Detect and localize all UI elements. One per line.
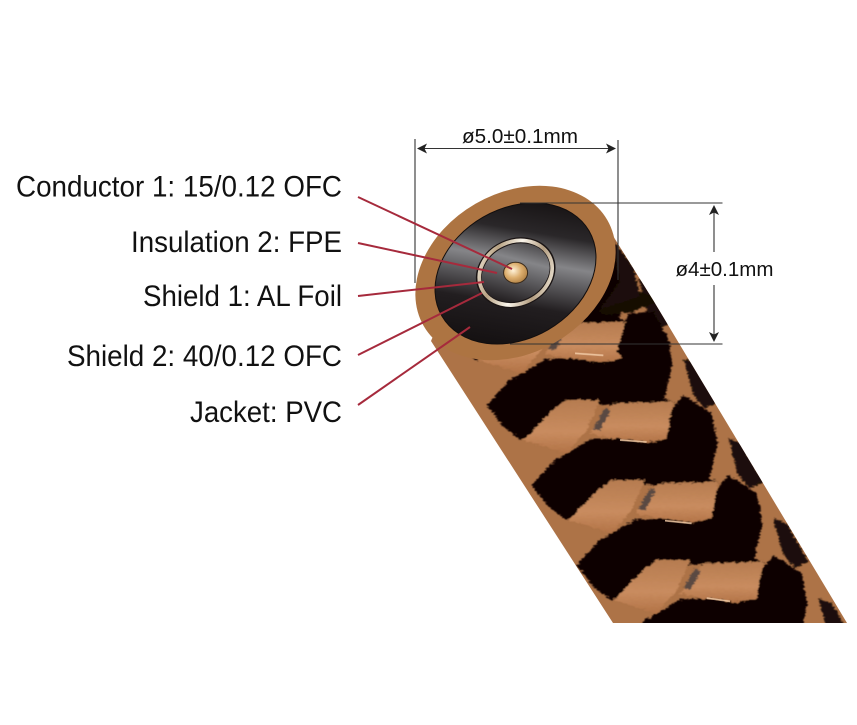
labels: [16, 170, 342, 429]
shield layer: dark core: [409, 175, 622, 372]
shield ring: foil: [468, 229, 563, 317]
diameter dimension: 4 mm: ø4±0.1mm: [676, 259, 774, 281]
cable cross-section infographic: [17, 129, 847, 623]
labels: Insulation 2: FPE: [131, 226, 342, 259]
diameter dimension: 5.0 mm: ø5.0±0.1mm: [462, 126, 578, 148]
diameter dimension: 5.0 mm: [415, 126, 618, 283]
diameter dimension: 4 mm: [510, 203, 774, 344]
labels: Shield 1: AL Foil: [143, 280, 342, 313]
braid highlights: [575, 353, 730, 601]
labels: Conductor 1: 15/0.12 OFC: [16, 170, 342, 204]
labels: Jacket: PVC: [190, 396, 342, 429]
braided cable body: [431, 238, 847, 623]
conductor core: [504, 262, 528, 283]
cable end: jacket PVC ring: [384, 151, 647, 395]
leader lines: [358, 197, 512, 405]
labels: Shield 2: 40/0.12 OFC: [67, 340, 342, 373]
